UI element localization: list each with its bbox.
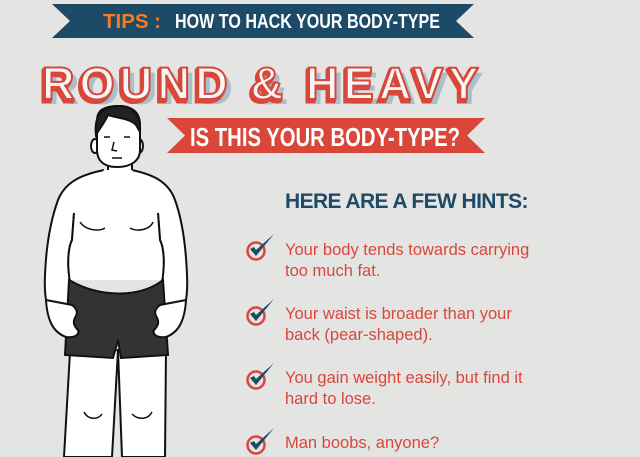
hint 2: back (pear-shaped). — [285, 326, 433, 344]
red ribbon — [167, 118, 485, 153]
top ribbon — [52, 4, 474, 38]
hint 3: You gain weight easily, but find it — [285, 369, 523, 387]
hint 2 — [246, 299, 512, 344]
hint 1 — [246, 234, 529, 280]
hint 4: Man boobs, anyone? — [285, 434, 439, 452]
hands — [46, 300, 186, 337]
shorts — [65, 280, 168, 358]
hint 4 — [246, 428, 439, 455]
hint 2: Your waist is broader than your — [285, 305, 512, 323]
hint 3 — [246, 363, 523, 408]
title: ROUND & HEAVY — [42, 58, 490, 109]
title: ROUND & HEAVY — [41, 60, 489, 110]
ribbon text: TIPS : — [103, 11, 161, 33]
hint 1: too much fat. — [285, 262, 380, 280]
hint 3: hard to lose. — [285, 390, 376, 408]
figure: man — [44, 105, 188, 457]
head — [91, 106, 143, 167]
hint 1: Your body tends towards carrying — [285, 241, 529, 259]
hints heading: HERE ARE A FEW HINTS: — [285, 190, 528, 213]
